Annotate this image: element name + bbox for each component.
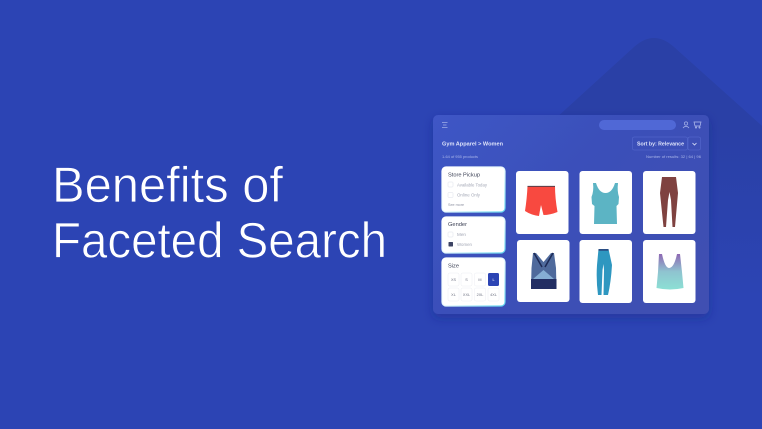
product card: gradient crop top: [643, 240, 696, 303]
breadcrumb: Gym Apparel > Women: [442, 142, 504, 148]
title: Benefits of: [52, 157, 283, 213]
filter card: store pickup: Store Pickup: [448, 172, 480, 178]
results count: 1-64 of 955 products: [442, 155, 478, 159]
icon: user: [683, 122, 689, 128]
decorative diamond shape: [510, 38, 762, 340]
icon: cart: [694, 122, 701, 128]
filter card: gender: Men: [457, 232, 467, 237]
product card: brown leggings: [643, 171, 696, 234]
title: [52, 157, 387, 268]
sort dropdown: Sort by: Relevance: [637, 142, 684, 148]
filter card: size: 4XL: [490, 293, 497, 297]
results per page: Number of results: 32 | 64 | 96: [646, 155, 701, 159]
filter card: store pickup: Available Today: [457, 182, 488, 188]
filter card: size: XXL: [463, 293, 470, 297]
filter card: size: L: [492, 278, 495, 282]
filter card: gender: [442, 217, 505, 253]
filter card: store pickup: Online Only: [457, 192, 481, 198]
filter card: size: M: [478, 278, 482, 282]
filter card: size: Size: [448, 264, 459, 270]
app window panel: [433, 115, 709, 314]
product card: red shorts: [516, 171, 568, 234]
product card: blue leggings: [580, 240, 632, 303]
filter card: gender: Gender: [448, 222, 467, 228]
product card: teal tank top: [580, 171, 632, 234]
filter card: size: S: [465, 278, 468, 282]
product card: navy sports bra: [517, 240, 570, 302]
title: Faceted Search: [52, 212, 387, 268]
filter card: size: [442, 258, 505, 306]
search bar: [599, 120, 676, 130]
filter card: size: XL: [451, 293, 456, 297]
filter card: size: 2XL: [477, 293, 483, 297]
filter card: size: XS: [451, 278, 456, 282]
sort dropdown: [632, 137, 700, 150]
filter card: store pickup: See more: [448, 203, 464, 207]
icon: menu: [442, 122, 448, 128]
filter card: gender: Women: [457, 242, 473, 247]
filter card: store pickup: [442, 167, 505, 212]
